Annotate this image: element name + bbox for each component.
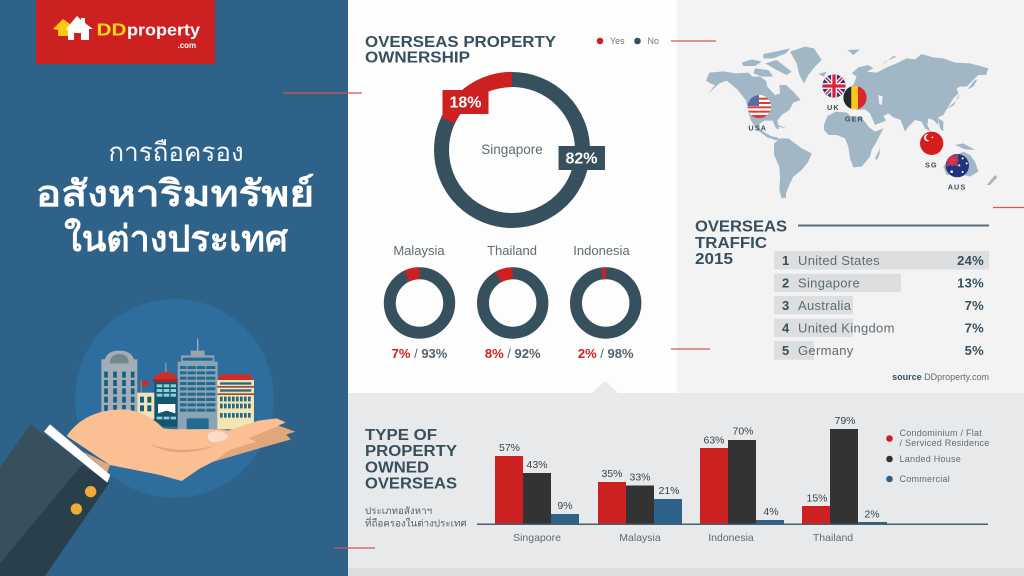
legend: No <box>648 36 659 46</box>
heading: PROPERTY <box>365 443 457 460</box>
flag: Singapore <box>920 132 943 155</box>
row: United States <box>774 251 989 270</box>
decorative accent lines <box>283 41 1024 548</box>
row: United States: United States <box>798 253 880 268</box>
label: centre: Singapore <box>481 142 543 157</box>
title line 3: ในต่างประเทศ <box>64 217 289 259</box>
row: United States: 24% <box>957 253 984 268</box>
Thai subheading: ที่ถือครองในต่างประเทศ <box>365 516 467 530</box>
row: Australia: Australia <box>798 298 852 313</box>
donut: Indonesia: Indonesia <box>573 243 630 258</box>
row: Singapore: 2 <box>782 276 789 290</box>
donut: Thailand: Thailand <box>487 243 537 258</box>
label: 18% <box>442 90 488 114</box>
panel: overseas traffic table <box>695 219 989 382</box>
heading: TRAFFIC <box>695 235 767 252</box>
row: Singapore: 13% <box>957 276 984 290</box>
building: red dome teal tower <box>153 363 178 427</box>
row: Singapore: Singapore <box>798 276 860 290</box>
row: Australia: 3 <box>782 298 789 313</box>
sleeve <box>0 424 110 576</box>
bars: Malaysia <box>598 468 682 544</box>
heading <box>365 427 457 492</box>
domain: .com <box>178 41 196 50</box>
title line 1: การถือครอง <box>108 137 244 167</box>
row: Germany: 5% <box>965 343 984 358</box>
legend <box>597 36 659 46</box>
bar chart <box>477 415 988 544</box>
heading <box>365 34 556 67</box>
bars: Thailand: 15% <box>806 492 828 504</box>
bars: Thailand <box>802 415 887 544</box>
bars: Indonesia: 4% <box>763 506 779 518</box>
building: small cream block <box>137 380 155 419</box>
label: 82%: 82% <box>565 150 598 168</box>
heading: OVERSEAS <box>695 219 787 236</box>
title line 2: อสังหาริมทรัพย์ <box>36 173 314 214</box>
flag: Germany <box>843 86 867 109</box>
heading: OVERSEAS <box>365 476 457 492</box>
caspian sea <box>878 95 883 105</box>
bars: Singapore <box>495 442 579 544</box>
flag: Australia <box>946 154 969 177</box>
illustration: hand holding buildings <box>0 299 295 576</box>
bars: Indonesia: 70% <box>732 426 754 438</box>
donut: Malaysia: Malaysia <box>393 243 445 258</box>
panel: overseas property ownership <box>365 34 659 361</box>
row: Germany: Germany <box>798 343 854 358</box>
row: United Kingdom: 7% <box>965 320 984 336</box>
continents <box>706 47 997 198</box>
icon: houses <box>53 16 93 40</box>
donut: Thailand: 8% / 92% <box>485 346 541 361</box>
chart legend <box>886 428 990 484</box>
chart legend: Commercial <box>900 474 950 484</box>
label: 18%: 18% <box>449 94 482 112</box>
chart legend: / Serviced Residence <box>900 438 990 448</box>
row: United States: 1 <box>782 253 789 268</box>
bars: Singapore: 57% <box>499 442 520 454</box>
donut: Indonesia: 2% / 98% <box>578 346 634 361</box>
label: 82% <box>558 146 605 170</box>
bars: Singapore: Singapore <box>513 532 561 544</box>
bars: Singapore: 9% <box>557 500 573 512</box>
chart legend: Condominium / Flat <box>900 428 982 438</box>
bars: Malaysia: 35% <box>601 468 623 480</box>
bars: Indonesia <box>700 426 784 544</box>
circle backdrop <box>75 299 274 498</box>
building: red roof cream block <box>217 374 254 429</box>
source: source DDproperty.com <box>892 372 989 382</box>
bars: Malaysia: 21% <box>658 485 680 497</box>
label: GER: GER <box>845 115 864 124</box>
row: Germany <box>774 341 984 360</box>
donut: Singapore <box>418 56 606 244</box>
logo <box>36 0 215 64</box>
building: tall glass tower <box>178 339 218 430</box>
Thai subheading <box>365 506 467 530</box>
label: UK: UK <box>827 103 840 112</box>
world map with flags <box>706 47 997 198</box>
brand name: DD <box>96 20 126 40</box>
donut: Indonesia <box>573 243 639 361</box>
flag: USA <box>748 95 771 118</box>
bars: Indonesia: 63% <box>703 434 725 446</box>
panel: left title column <box>0 0 348 576</box>
row: Germany: 5 <box>782 343 789 358</box>
label: USA: USA <box>748 124 767 133</box>
heading: 2015 <box>695 251 733 268</box>
bars: Malaysia: 33% <box>629 472 651 484</box>
row: Australia <box>774 296 984 314</box>
legend: Yes <box>610 36 625 46</box>
heading <box>695 219 787 268</box>
Thai subheading: ประเภทอสังหาฯ <box>365 506 432 517</box>
bars: Malaysia: Malaysia <box>619 532 661 544</box>
donut: Thailand <box>472 243 553 361</box>
chart legend: Landed House <box>900 454 961 464</box>
building: grey dome tower <box>101 351 137 416</box>
row: Singapore <box>774 274 984 292</box>
heading: OWNERSHIP <box>365 50 470 67</box>
heading: OVERSEAS PROPERTY <box>365 34 556 51</box>
row: United Kingdom: United Kingdom <box>798 320 895 336</box>
bars: Indonesia: Indonesia <box>708 532 754 544</box>
brand name suffix: property <box>127 22 201 40</box>
row: United Kingdom: 4 <box>782 320 790 336</box>
heading: OWNED <box>365 460 429 476</box>
label: SG: SG <box>925 160 938 169</box>
bars: Thailand: Thailand <box>813 532 853 544</box>
heading: TYPE OF <box>365 427 437 444</box>
panel: type of property owned overseas <box>365 415 990 544</box>
bars: Singapore: 43% <box>526 459 548 471</box>
heading rule <box>798 224 989 226</box>
row: United Kingdom <box>774 319 984 337</box>
label: AUS: AUS <box>948 182 966 191</box>
bars: Thailand: 2% <box>864 508 880 520</box>
hand <box>67 409 295 481</box>
donut: Malaysia <box>380 243 459 361</box>
donut: Malaysia: 7% / 93% <box>392 346 448 361</box>
flag: UK <box>822 74 846 98</box>
row: Australia: 7% <box>965 298 984 313</box>
bars: Thailand: 79% <box>834 415 856 427</box>
